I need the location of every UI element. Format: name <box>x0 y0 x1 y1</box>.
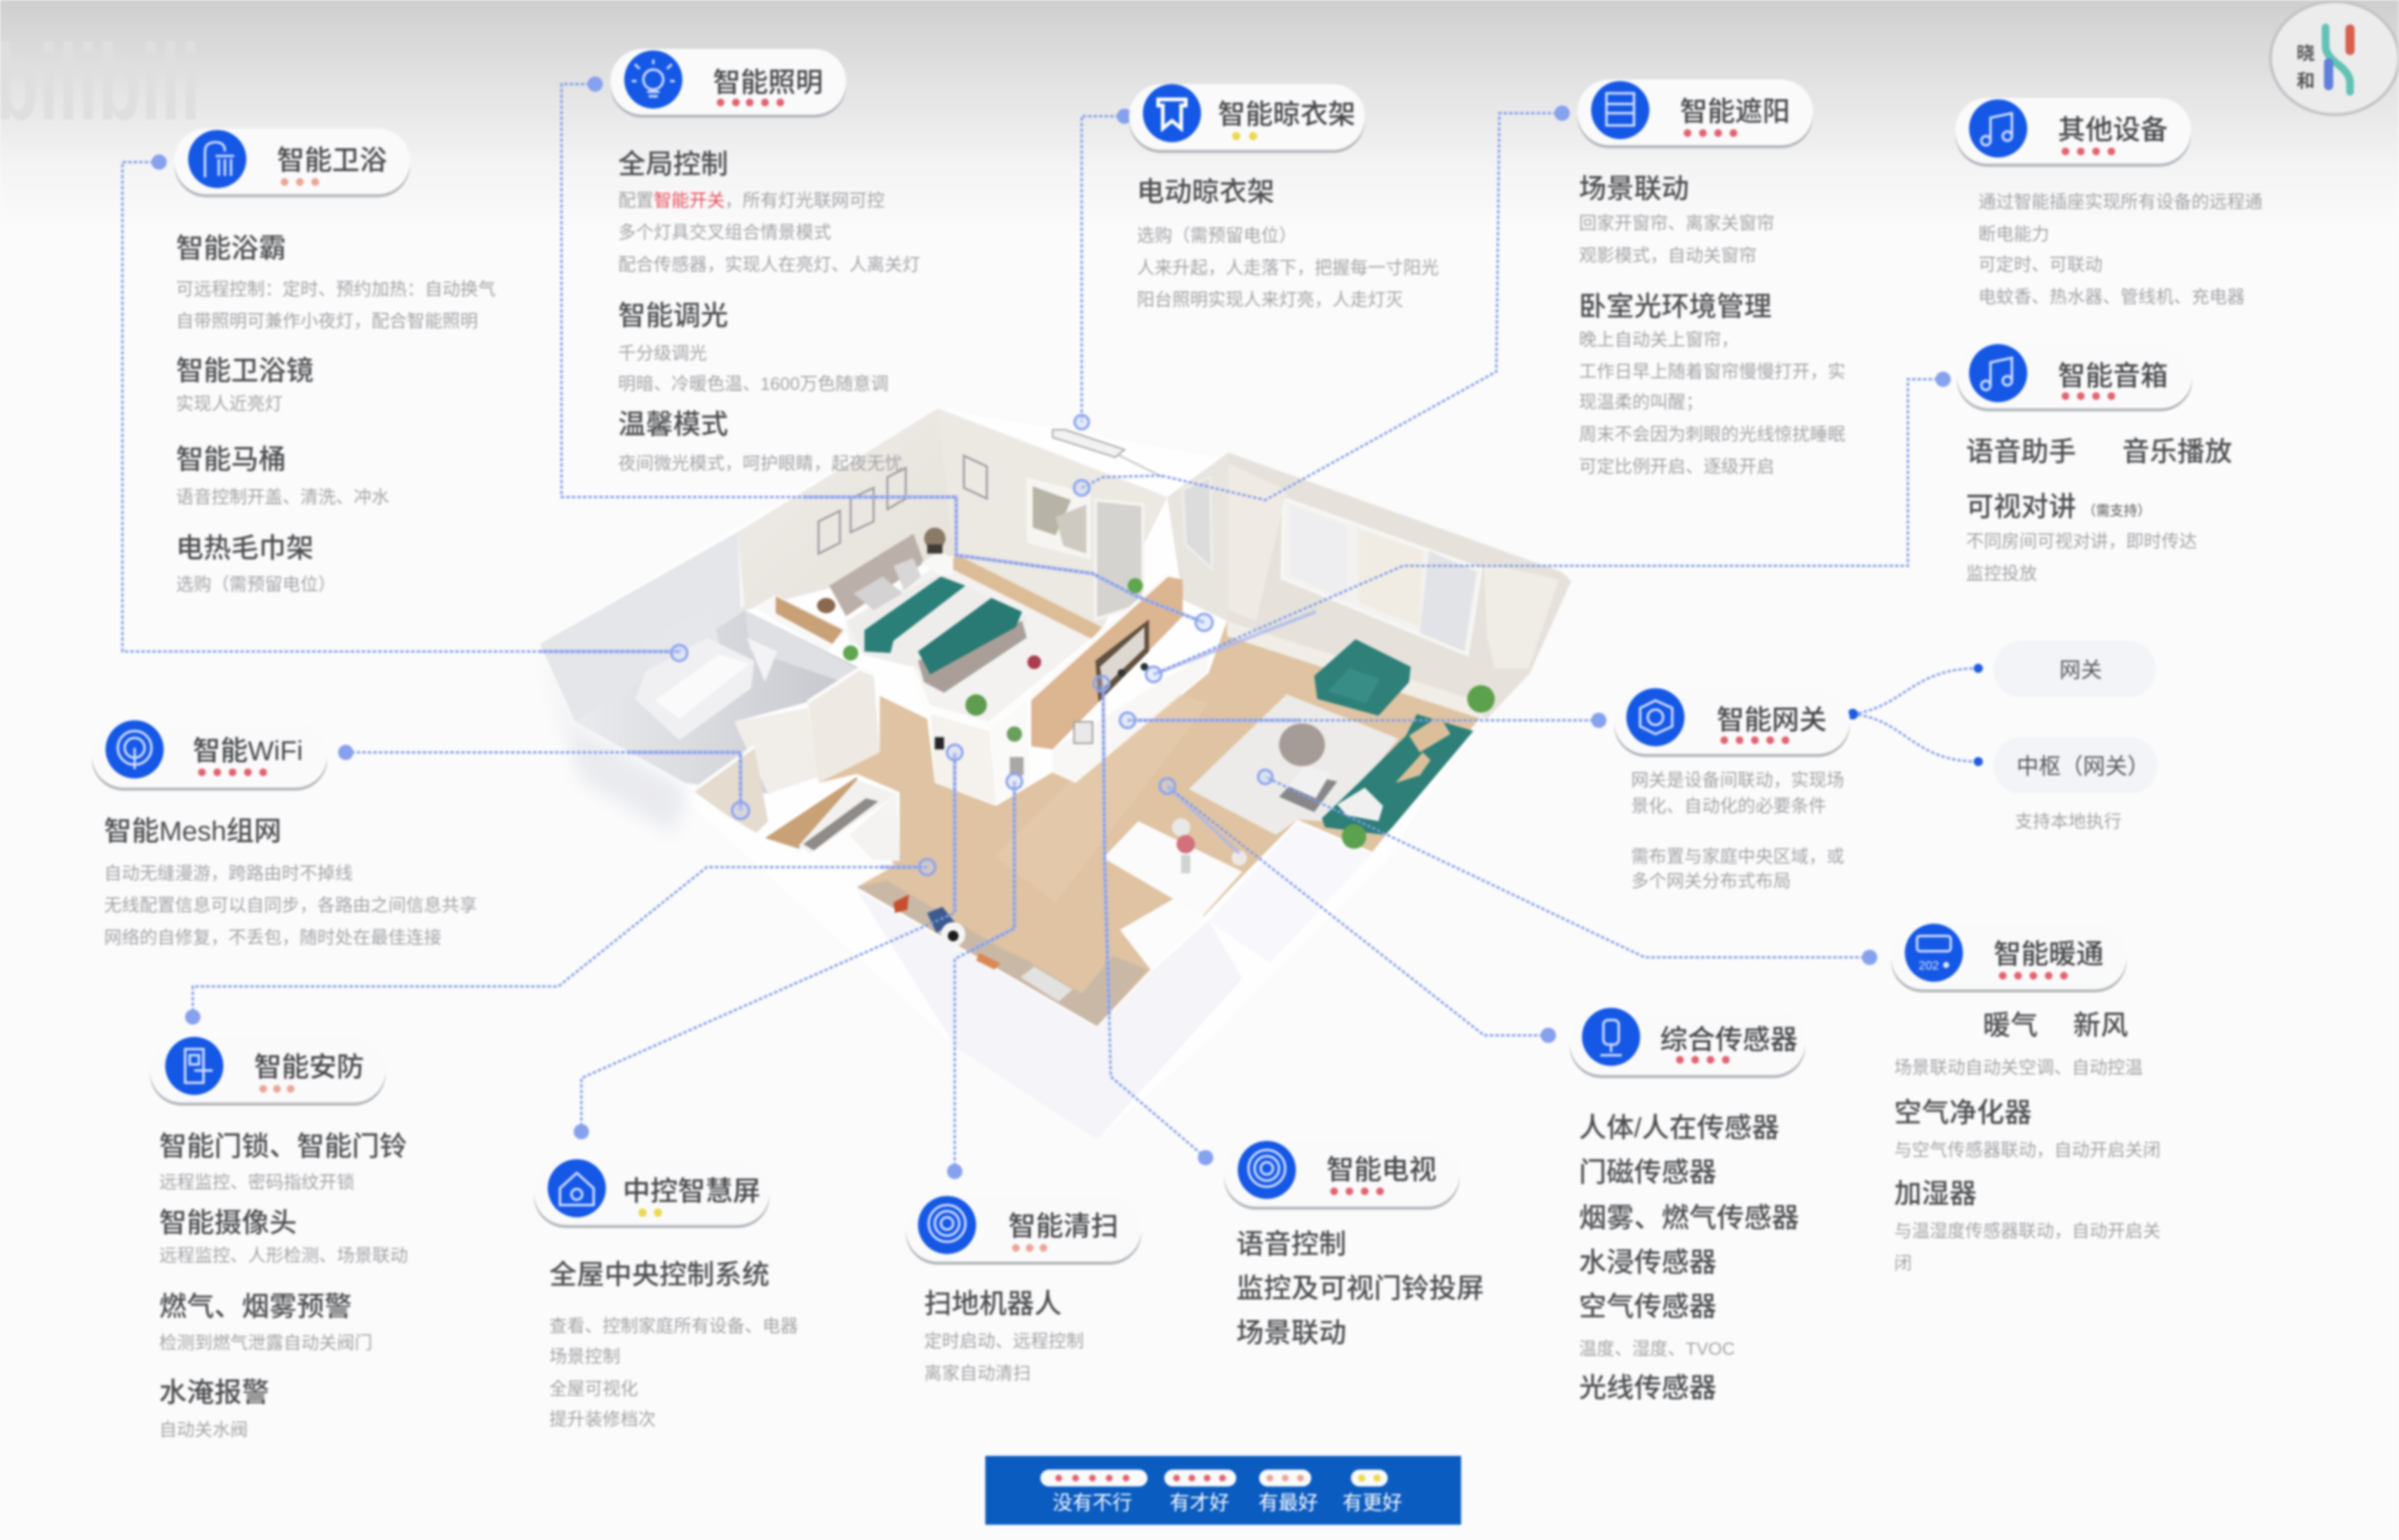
details: 智能电视: 场景联动 <box>1236 1318 1346 1349</box>
details: 智能安防: 燃气、烟雾预警 <box>159 1292 352 1323</box>
header pill: 智能音箱: 智能音箱 <box>2058 361 2168 392</box>
details: 其他设备: 电蚊香、热水器、管线机、充电器 <box>1978 288 2245 307</box>
panel: 智能卫浴 <box>175 128 496 595</box>
details: 智能照明: 全局控制 <box>618 149 728 180</box>
header pill: 智能照明: 智能照明 <box>713 67 823 98</box>
details: 智能安防: 检测到燃气泄露自动关阀门 <box>159 1333 372 1353</box>
panel: 智能电视 <box>1224 1141 1484 1349</box>
details: 智能遮阳: 回家开窗帘、离家关窗帘 <box>1579 214 1775 234</box>
panel: 智能晾衣架 <box>1129 84 1439 310</box>
robot vacuum <box>927 907 965 947</box>
header pill: 中控智慧屏 <box>534 1159 770 1228</box>
legend: 没有不行 <box>1053 1492 1132 1514</box>
details: 智能电视 <box>1236 1229 1484 1349</box>
panel: 综合传感器 <box>1570 1008 1806 1403</box>
details: 智能卫浴: 智能浴霸 <box>176 234 286 264</box>
details: 智能音箱: 监控投放 <box>1966 565 2037 583</box>
details: 中控智慧屏: 查看、控制家庭所有设备、电器 <box>549 1316 798 1336</box>
connector lines <box>122 76 1983 1179</box>
option: 网关 <box>1994 641 2156 697</box>
details: 综合传感器 <box>1579 1113 1799 1403</box>
header pill: 智能卫浴: 智能卫浴 <box>277 145 387 176</box>
details: 智能晾衣架 <box>1137 177 1439 310</box>
details: 智能照明: 智能调光 <box>618 301 728 332</box>
details: 其他设备 <box>1978 193 2262 307</box>
panel: 智能音箱 <box>1957 342 2232 583</box>
header pill: 智能安防: 智能安防 <box>254 1052 364 1083</box>
details: 智能安防: 智能门锁、智能门铃 <box>159 1131 407 1162</box>
option: 网关: 网关 <box>2059 658 2102 682</box>
legend: 有才好 <box>1169 1492 1230 1514</box>
legend <box>986 1456 1461 1525</box>
details: 智能晾衣架: 电动晾衣架 <box>1137 177 1275 208</box>
sofa area <box>1189 640 1495 849</box>
details: 智能照明: 温馨模式 <box>618 409 728 440</box>
details: 综合传感器: 烟雾、燃气传感器 <box>1579 1203 1799 1234</box>
details: 智能安防: 远程监控、人形检测、场景联动 <box>159 1246 408 1266</box>
details: 智能暖通: 与空气传感器联动，自动开启关闭 <box>1894 1141 2161 1161</box>
details: 智能暖通: 空气净化器 <box>1894 1097 2031 1128</box>
details: 智能清扫: 定时启动、远程控制 <box>924 1332 1084 1351</box>
header pill: 智能暖通: 202 <box>1918 959 1939 973</box>
details: 智能遮阳: 晚上自动关上窗帘， <box>1579 330 1739 350</box>
details: 综合传感器: 水浸传感器 <box>1579 1248 1716 1278</box>
header pill: 智能网关: 智能网关 <box>1716 705 1827 736</box>
bathroom door and hall walls <box>693 668 895 887</box>
details: 智能卫浴: 电热毛巾架 <box>176 533 314 564</box>
details: 智能暖通: 闭 <box>1894 1254 1912 1274</box>
header pill: 智能WiFi: 智能WiFi <box>193 736 303 766</box>
details: 智能清扫: 扫地机器人 <box>924 1288 1062 1319</box>
details: 智能遮阳: 观影模式，自动关窗帘 <box>1579 246 1756 266</box>
details: 综合传感器: 温度、湿度、TVOC <box>1579 1339 1735 1359</box>
bathroom <box>540 532 860 794</box>
details: 智能遮阳: 工作日早上随着窗帘慢慢打开，实 <box>1579 363 1846 382</box>
details: 智能电视: 语音控制 <box>1236 1229 1346 1259</box>
panel: 智能安防 <box>150 1037 408 1440</box>
header pill: 智能照明 <box>610 49 846 118</box>
bedroom walls <box>737 408 1167 630</box>
details: 智能晾衣架: 阳台照明实现人来灯亮，人走灯灭 <box>1137 290 1404 310</box>
details: 智能暖通: 加湿器 <box>1894 1178 1977 1209</box>
details: 智能照明: 明暗、冷暖色温、1600万色随意调 <box>618 374 889 394</box>
legend: 有最好 <box>1258 1492 1318 1514</box>
details: 智能暖通 <box>1894 1010 2161 1274</box>
details: 智能照明: 配置智能开关，所有灯光联网可控 <box>618 191 885 210</box>
details: 智能暖通: 暖气 <box>1983 1010 2038 1041</box>
details: 智能照明: 多个灯具交叉组合情景模式 <box>618 223 831 243</box>
details: 智能卫浴: 智能卫浴镜 <box>176 356 314 386</box>
details: 智能照明: 夜间微光模式，呵护眼睛，起夜无忧 <box>618 454 902 473</box>
details: 智能照明: 千分级调光 <box>618 344 707 363</box>
header pill: 智能暖通: 智能暖通 <box>1994 939 2104 970</box>
3D floor plan <box>540 408 1571 1140</box>
details: 智能卫浴: 选购（需预留电位） <box>176 575 336 595</box>
details: 中控智慧屏 <box>549 1259 798 1429</box>
details: 智能暖通: 新风 <box>2073 1010 2128 1041</box>
panel: 智能清扫 <box>906 1196 1141 1384</box>
shoe cabinet <box>765 777 899 861</box>
details: 智能音箱: （需支持） <box>2083 504 2151 519</box>
option: 中枢（网关）: 中枢（网关） <box>2017 753 2149 778</box>
header pill: 其他设备: 其他设备 <box>2058 114 2168 145</box>
details: 中控智慧屏: 全屋可视化 <box>549 1379 638 1399</box>
details: 智能遮阳: 卧室光环境管理 <box>1579 292 1772 323</box>
details: 智能网关: 多个网关分布式布局 <box>1631 872 1791 891</box>
details: 智能遮阳: 现温柔的叫醒； <box>1579 393 1703 412</box>
logo <box>2271 1 2399 115</box>
details: 智能卫浴: 自带照明可兼作小夜灯，配合智能照明 <box>176 312 478 332</box>
details: 智能清扫: 离家自动清扫 <box>924 1364 1030 1384</box>
details: 智能安防 <box>159 1131 408 1440</box>
details: 中控智慧屏: 场景控制 <box>549 1347 620 1367</box>
panel: 智能暖通 <box>1891 924 2161 1274</box>
details: 智能卫浴: 实现人近亮灯 <box>176 394 283 414</box>
details: 智能照明: 配合传感器，实现人在亮灯、人离关灯 <box>618 255 920 275</box>
details: 智能晾衣架: 选购（需预留电位） <box>1137 227 1297 246</box>
header pill: 智能电视: 智能电视 <box>1326 1154 1437 1185</box>
details: 智能暖通: 与温湿度传感器联动，自动开启关 <box>1894 1222 2161 1241</box>
details: 智能安防: 智能摄像头 <box>159 1208 297 1238</box>
details: 智能音箱 <box>1966 437 2232 583</box>
header pill: 其他设备 <box>1955 98 2191 167</box>
details: 智能音箱: 不同房间可视对讲，即时传达 <box>1966 532 2197 552</box>
details: 综合传感器: 空气传感器 <box>1579 1292 1716 1323</box>
details: 智能清扫 <box>924 1288 1084 1384</box>
details: 智能安防: 自动关水阀 <box>159 1421 248 1440</box>
panel: 智能WiFi <box>92 720 477 948</box>
header pill: 智能网关 <box>1614 688 1850 757</box>
details: 智能遮阳 <box>1579 174 1846 477</box>
header pill: 智能卫浴 <box>175 128 410 197</box>
header pill: 综合传感器: 综合传感器 <box>1660 1025 1798 1055</box>
details: 综合传感器: 光线传感器 <box>1579 1372 1716 1403</box>
header pill: 智能清扫 <box>906 1196 1141 1264</box>
bilibili watermark: bilibili <box>0 23 201 142</box>
details: 智能WiFi: 自动无缝漫游，跨路由时不掉线 <box>104 864 353 884</box>
panel: 智能遮阳 <box>1578 79 1846 477</box>
details: 智能安防: 水淹报警 <box>159 1377 269 1408</box>
header pill: 智能清扫: 智能清扫 <box>1008 1211 1118 1242</box>
details: 智能WiFi: 智能Mesh组网 <box>104 816 281 847</box>
header pill: 智能电视 <box>1224 1141 1460 1210</box>
living room back wall <box>1167 452 1571 719</box>
details: 智能网关: 需布置与家庭中央区域，或 <box>1631 847 1844 867</box>
details: 智能照明 <box>618 149 920 473</box>
details: 其他设备: 可定时、可联动 <box>1978 255 2103 275</box>
header pill: 综合传感器 <box>1570 1008 1806 1078</box>
option: 中枢（网关）: 支持本地执行 <box>2015 812 2122 832</box>
details: 智能卫浴 <box>176 234 496 595</box>
header pill: 智能遮阳 <box>1578 79 1813 149</box>
option: 中枢（网关） <box>1994 737 2157 832</box>
details: 智能暖通: 场景联动自动关空调、自动控温 <box>1894 1058 2143 1078</box>
details: 中控智慧屏: 全屋中央控制系统 <box>549 1259 770 1290</box>
details: 智能卫浴: 智能马桶 <box>176 445 286 475</box>
base shadow <box>540 408 1561 1140</box>
details: 智能音箱: 音乐播放 <box>2122 437 2232 468</box>
details: 智能音箱: 可视对讲 <box>1966 492 2076 522</box>
details: 智能网关: 景化、自动化的必要条件 <box>1631 797 1827 816</box>
header pill: 智能安防 <box>150 1037 386 1106</box>
legend: 有更好 <box>1343 1492 1402 1514</box>
details: 智能电视: 监控及可视门铃投屏 <box>1236 1274 1484 1304</box>
panel: 智能网关 <box>1614 641 2157 891</box>
header pill: 智能晾衣架 <box>1129 84 1365 153</box>
panel: 智能照明 <box>610 49 920 473</box>
header pill: 智能遮阳: 智能遮阳 <box>1680 96 1790 127</box>
header pill: 智能晾衣架: 智能晾衣架 <box>1218 100 1355 130</box>
details: 智能晾衣架: 人来升起，人走落下，把握每一寸阳光 <box>1137 258 1439 278</box>
bedroom floor and bed <box>754 527 1143 722</box>
details: 智能遮阳: 可定比例开启、逐级开启 <box>1579 457 1775 477</box>
details: 智能音箱: 语音助手 <box>1966 437 2076 468</box>
details: 中控智慧屏: 提升装修档次 <box>549 1410 656 1429</box>
details: 智能卫浴: 语音控制开盖、清洗、冲水 <box>176 487 389 507</box>
details: 其他设备: 通过智能插座实现所有设备的远程通 <box>1978 193 2262 212</box>
wooden floor <box>819 621 1490 1026</box>
details: 智能卫浴: 可远程控制：定时、预约加热：自动换气 <box>176 280 496 299</box>
details: 智能遮阳: 场景联动 <box>1579 174 1689 205</box>
details: 智能网关 <box>1631 771 1844 891</box>
header pill: 智能音箱 <box>1957 342 2193 412</box>
details: 智能网关: 网关是设备间联动，实现场 <box>1631 771 1844 790</box>
logo: 和 <box>2297 70 2315 91</box>
header pill: 中控智慧屏: 中控智慧屏 <box>623 1176 760 1207</box>
panel: 其他设备 <box>1955 98 2262 307</box>
header pill: 智能WiFi <box>92 720 328 790</box>
panel: 中控智慧屏 <box>534 1159 798 1429</box>
details: 智能WiFi <box>104 816 477 948</box>
dining table <box>1103 818 1247 970</box>
details: 综合传感器: 人体/人在传感器 <box>1579 1113 1780 1144</box>
details: 其他设备: 断电能力 <box>1978 224 2050 244</box>
header pill: 智能暖通 <box>1891 924 2127 992</box>
details: 综合传感器: 门磁传感器 <box>1579 1157 1716 1188</box>
details: 智能安防: 远程监控、密码指纹开锁 <box>159 1173 354 1192</box>
details: 智能WiFi: 无线配置信息可以自同步，各路由之间信息共享 <box>104 896 477 916</box>
partition and TV wall <box>909 575 1209 804</box>
details: 智能WiFi: 网络的自修复，不丢包，随时处在最佳连接 <box>104 928 442 948</box>
details: 智能遮阳: 周末不会因为刺眼的光线惊扰睡眠 <box>1579 425 1846 445</box>
logo: 晓 <box>2297 43 2315 64</box>
